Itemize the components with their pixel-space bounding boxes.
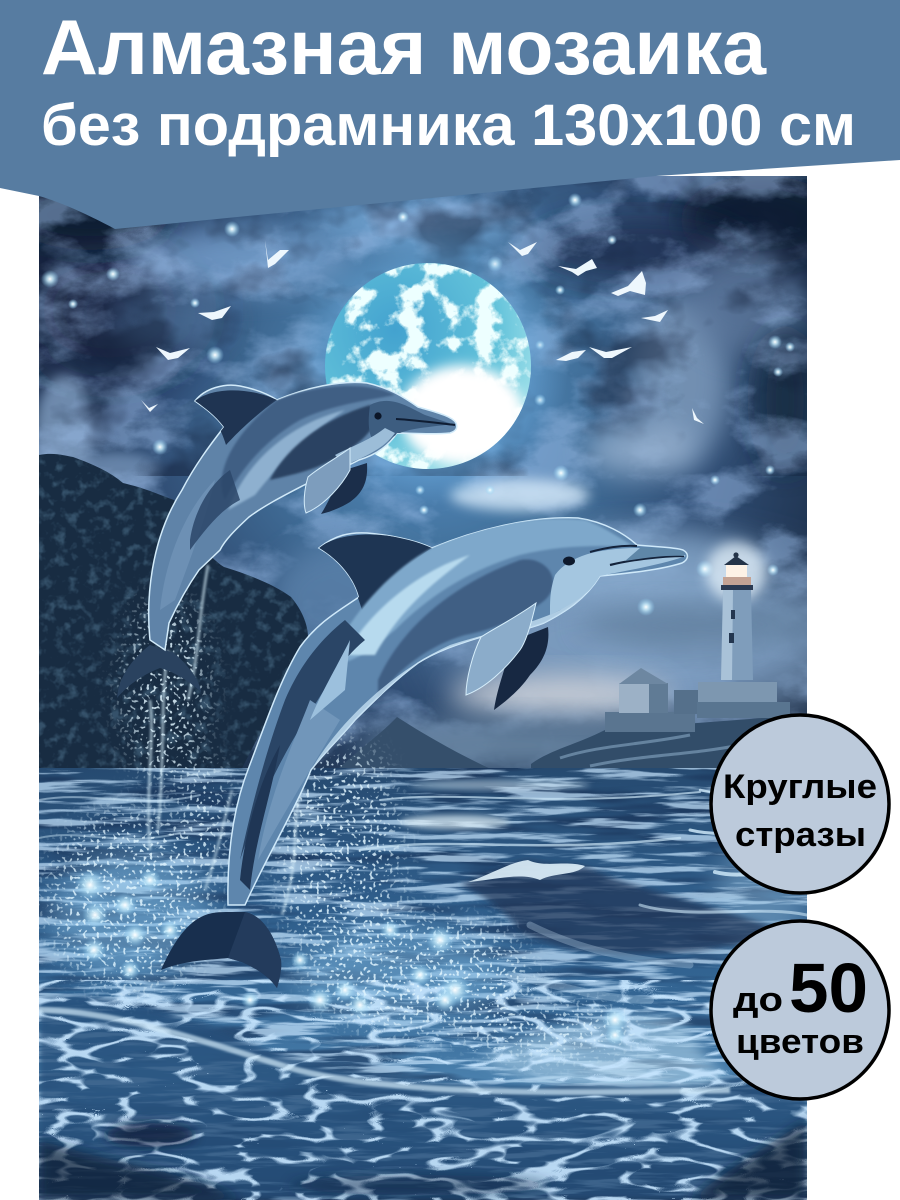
body xyxy=(228,518,687,905)
foreground rippling net xyxy=(39,996,807,1200)
badge: up to 50 colours xyxy=(711,921,889,1099)
lower sky glow xyxy=(272,546,358,635)
near flipper xyxy=(466,603,536,695)
far flipper xyxy=(321,463,367,514)
dorsal fin shade xyxy=(195,390,277,445)
moon xyxy=(295,233,556,492)
birds xyxy=(141,240,704,424)
badge: up to 50 colours: цветов xyxy=(736,1023,864,1061)
clouds xyxy=(10,175,850,776)
tower xyxy=(721,590,753,680)
dorsal fin shade xyxy=(319,534,432,610)
title: Алмазная мозаика xyxy=(41,3,767,91)
upper dolphin xyxy=(117,382,457,698)
tail flukes xyxy=(161,912,281,988)
badge: round rhinestones: стразы xyxy=(735,816,866,854)
badge: round rhinestones: Круглые xyxy=(723,768,877,806)
tail flukes xyxy=(117,645,201,698)
header banner xyxy=(0,0,900,229)
far flipper xyxy=(494,627,548,710)
water spray bubbles xyxy=(39,564,649,1072)
badge: round rhinestones xyxy=(711,715,889,893)
near flipper xyxy=(304,448,350,513)
lighthouse on rocky island xyxy=(531,542,807,772)
distant hill xyxy=(340,717,488,768)
wave highlights xyxy=(39,790,807,1000)
sea xyxy=(39,768,807,1200)
body xyxy=(149,382,457,650)
left wooded headland xyxy=(39,454,308,768)
night sky xyxy=(39,176,807,776)
subtitle: без подрамника 130х100 см xyxy=(41,93,856,158)
lower dolphin xyxy=(161,518,687,988)
painting: dolphins at moonlit sea xyxy=(10,175,850,1200)
buildings xyxy=(605,712,695,732)
distant wave with crest xyxy=(460,860,780,954)
stars xyxy=(41,193,795,616)
foam and bubble haze xyxy=(50,850,210,980)
moon reflection xyxy=(400,815,510,829)
badge: up to 50 colours: до xyxy=(733,981,783,1019)
rock xyxy=(531,718,769,768)
badge: up to 50 colours: 50 xyxy=(789,949,868,1027)
